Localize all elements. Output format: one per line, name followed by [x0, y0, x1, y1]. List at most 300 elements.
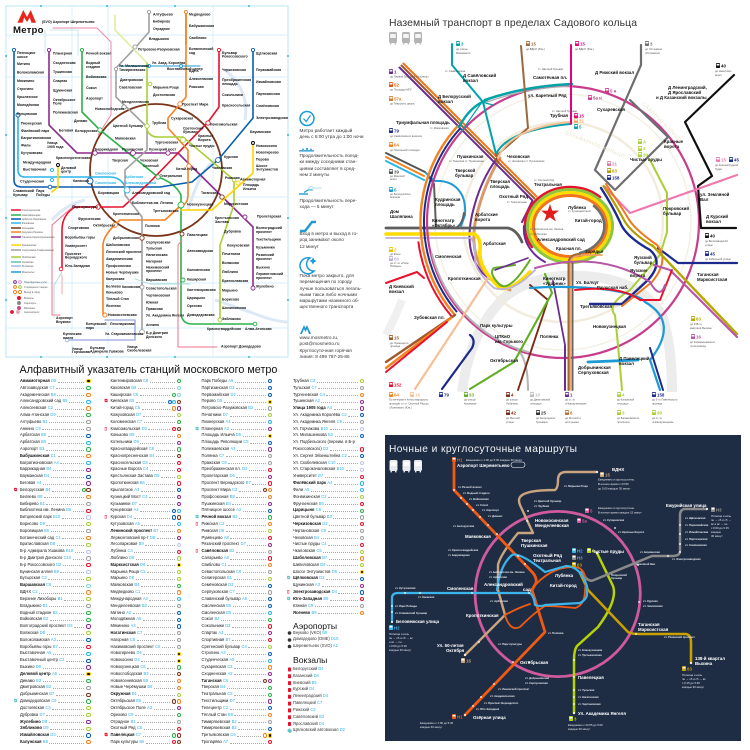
index column 4: Юго-Западная: [293, 596, 322, 601]
metro station labels: Рязанский: [256, 253, 274, 257]
index column 4: C2: [342, 453, 347, 458]
index column 3: Пражская: [202, 460, 220, 465]
metro station labels: Филёвский парк: [21, 129, 50, 133]
metro station labels: Крестьянская: [215, 216, 239, 220]
route legends: ground: до Лужнецкого: [390, 341, 409, 345]
index column 2: B1: [132, 691, 137, 696]
info: transfer: Продолжительность пере-: [300, 198, 357, 202]
index column 1: Битцевский парк: [20, 514, 52, 519]
metro station labels: Кунцевская: [17, 112, 37, 116]
metro station labels: Третьяковская: [153, 209, 179, 213]
index column 2: Новослободская: [110, 671, 142, 676]
night labels: каждые 30 минут: [568, 727, 591, 731]
index column 3: B1: [227, 575, 232, 580]
night labels: ст. Партизанская: [685, 537, 708, 541]
list: railway stations: [293, 666, 345, 732]
index column 1: Выставочный центр: [20, 657, 58, 662]
night labels: Н1: [457, 458, 463, 462]
ground labels: вокзал: [619, 361, 634, 366]
info: night advice: маршрутами наземного об-: [300, 298, 359, 303]
ground labels: бульвар: [663, 211, 682, 216]
index column 2: Охотный Ряд: [110, 725, 136, 730]
metro station labels: Скобелевская: [127, 348, 151, 352]
index column 2: Каховская: [110, 385, 130, 390]
metro station labels: Добрынинская: [113, 236, 139, 240]
index column 4: C9: [321, 528, 326, 533]
ground labels: Третьяковская: [580, 304, 612, 309]
index column 2: D4: [127, 514, 132, 519]
night labels: Кропоткинская: [466, 613, 499, 618]
index column 2: C8: [155, 644, 160, 649]
metro station labels: Нагорная: [146, 260, 162, 264]
metro station labels: Электрозаводская: [256, 116, 288, 120]
night labels: до 5:00 каждые 30 минут: [598, 486, 631, 490]
index column 1: B5: [62, 398, 67, 403]
index column 1: A3: [51, 637, 56, 642]
info: contacts: www.mosmetro.ru,: [300, 335, 338, 340]
metro station labels: проспект: [256, 257, 272, 261]
route legends: ground: до Никитских: [715, 69, 732, 73]
metro station labels: Смоленская: [95, 181, 116, 185]
list: railway stations: Киевский B5: [293, 680, 317, 685]
night labels: с 0:00 до 5:30: [389, 644, 407, 648]
night labels: ст. Баррикадная: [448, 553, 470, 557]
metro station labels: Волжская: [222, 261, 239, 265]
metro station labels: Измайловская: [256, 80, 281, 84]
metro station labels: проспект: [146, 269, 162, 273]
metro station labels: Печатники: [222, 252, 240, 256]
metro station labels: Битцевский: [86, 322, 107, 326]
index column 2: Мякинино: [110, 623, 129, 628]
ground labels: ЦПКиО: [495, 334, 511, 339]
index column 2: B9: [129, 432, 134, 437]
ground labels: им. Горького: [495, 339, 523, 344]
index column 1: D8: [50, 541, 55, 546]
route legends: ground: 40: [721, 64, 726, 68]
map legend: Строящиеся станции: [24, 286, 48, 289]
index column 2: D4: [134, 657, 140, 662]
metro station labels: Пролетарская: [257, 214, 281, 218]
night labels: ст. Цветной бульвар: [534, 499, 562, 503]
index column 4: Шаболовская: [293, 555, 321, 560]
index column 4: Трубная: [293, 378, 309, 383]
index column 2: Люблино: [110, 555, 128, 560]
info: schedule: [300, 128, 364, 139]
index column 1: Александровский сад: [20, 398, 61, 403]
route legends: ground: 15: [531, 42, 536, 46]
night labels: Беловежская улица: [396, 619, 440, 624]
metro station labels: Международная: [23, 160, 51, 164]
index column 1: B2: [43, 616, 48, 621]
index column 3: B2: [229, 548, 234, 553]
index column 2: A2: [126, 610, 131, 615]
index column 2: Лубянка: [110, 548, 126, 553]
metro station labels: Красные: [198, 134, 213, 138]
index column 3: D2: [230, 392, 236, 397]
map legend: Сокольническая: [22, 209, 41, 212]
index column 3: D3: [229, 385, 234, 390]
night labels: 63: [687, 666, 692, 672]
index column 1: Водный стадион: [20, 610, 51, 615]
index column 1: B10: [66, 548, 73, 553]
index column 4: Щукинская: [293, 582, 314, 587]
index column 3: A5: [242, 596, 247, 601]
route legends: ground: до Останкино: [645, 47, 663, 51]
night labels: Ежедневно с 1:00 до 5:30: [420, 721, 454, 725]
index column 4: D5: [332, 569, 337, 574]
index column 3: C6: [223, 678, 228, 683]
index column 3: Саларьево: [202, 555, 223, 560]
ground labels: Театральная: [534, 182, 562, 187]
metro station labels: Каховская: [122, 285, 140, 289]
metro station labels: проспект: [256, 230, 272, 234]
index column 3: Планерная: [202, 426, 223, 431]
info: interval: нем 2 минуты: [300, 172, 329, 177]
index column 4: C4: [321, 541, 327, 546]
index column 2: Красносельская: [110, 460, 141, 465]
route legends: ground: до Загородного: [536, 416, 556, 420]
metro station labels: Университет: [65, 244, 87, 248]
ground labels: [389, 67, 730, 375]
info: schedule: Метро работает каждый: [300, 128, 352, 132]
index column 1: A4: [37, 480, 42, 485]
index column 3: B5: [226, 610, 231, 615]
ground labels: Д Рижский вокзал: [595, 70, 634, 75]
ground labels: ст. Тверская ст. Пушкинская: [449, 159, 484, 163]
route legends: ground: до Кабельной улицы: [705, 257, 731, 261]
ground labels: ст. Цветной бульвар: [538, 67, 564, 71]
index column 2: A5: [135, 521, 140, 526]
index column 2: A4: [134, 507, 139, 512]
route legends: ground: проезда: [652, 402, 663, 406]
index column 4: B3: [327, 514, 332, 519]
index column 2: A3: [134, 487, 139, 492]
index column 2: Парк культуры: [110, 739, 138, 744]
index column 1: C8: [46, 582, 51, 587]
ground labels: Новокузнецкая: [593, 324, 626, 329]
index column 3: Пионерская: [202, 419, 224, 424]
night labels: ст. Измайловская: [685, 530, 709, 534]
night labels: Покровский: [611, 573, 627, 577]
map legend: Замоскворецкая: [22, 214, 41, 217]
info: contacts: post@mosmetro.ru: [300, 341, 339, 346]
metro station labels: [13, 12, 288, 354]
metro station labels: Зябликово: [222, 317, 241, 321]
info: entry: 12 минут: [300, 244, 319, 249]
metro station labels: Поле: [53, 102, 62, 106]
metro station labels: Баррикадная: [95, 148, 118, 152]
index column 1: B6: [44, 528, 49, 533]
night labels: Озёрная улица: [473, 715, 506, 720]
night labels: ст. Арбатская: [489, 575, 507, 579]
index column 3: B2: [214, 616, 219, 621]
index column 1: D8: [40, 630, 45, 635]
index column 1: D2: [56, 562, 61, 567]
index column 4: C7: [311, 385, 317, 390]
metro station labels: Горчакова: [72, 350, 90, 354]
metro station labels: Библиотека им. Ленина: [132, 201, 173, 205]
ground labels: Зарядье: [585, 249, 604, 254]
metro station labels: Пионерская: [21, 122, 42, 126]
night labels: [389, 457, 732, 731]
list: railway stations: Рижский C3: [293, 707, 316, 712]
metro station labels: Лермонтовский: [256, 272, 283, 276]
index column 1: B4: [46, 466, 51, 471]
index column 4: C4: [320, 392, 325, 397]
metro station labels: Улица: [127, 345, 138, 349]
night labels: 15: [605, 472, 610, 478]
route legends: ground: до ст. м. «Парк: [390, 261, 409, 265]
index column 2: Нагорная: [110, 637, 128, 642]
index column 3: Серпуховская: [202, 589, 228, 594]
metro station labels: Киевская: [73, 179, 89, 183]
index column 1: C9: [51, 698, 56, 703]
metro station labels: Братиславская: [222, 279, 248, 283]
night labels: ст. Белорусская: [453, 524, 475, 528]
index column 3: D3: [228, 582, 233, 587]
ground labels: ул. Каретный Ряд: [528, 93, 567, 98]
ground labels: Раушская наб.: [597, 285, 628, 290]
night labels: ст. Водный стадион: [463, 491, 490, 495]
index column 1: C1: [51, 453, 56, 458]
map legend: Арбатско-Покровская: [22, 218, 47, 221]
metro station labels: Улица: [47, 141, 58, 145]
index column 2: Кузнецкий Мост: [110, 494, 141, 499]
map legend: Филёвская: [22, 222, 35, 225]
metro station labels: Выставочный центр: [167, 67, 203, 71]
icons: ground vehicles: [389, 32, 422, 44]
index column 1: Алтуфьево: [20, 419, 41, 424]
index column 1: B8: [51, 392, 56, 397]
index column 4: Ул. Горчакова: [293, 426, 319, 431]
ground labels: Покровский: [663, 206, 689, 211]
ground labels: Яузские: [630, 268, 648, 273]
index column 1: Волгоградский проспект: [20, 623, 66, 628]
metro station labels: Марьино: [222, 288, 238, 292]
index column 1: ВДНХ: [20, 589, 31, 594]
ground labels: Яузский: [634, 255, 652, 260]
route legends: ground: ного рынка: [565, 421, 579, 424]
ground labels: Кудринская: [435, 197, 461, 202]
index column 3: Сокол: [202, 616, 213, 621]
route legends: ground: 3: [643, 146, 646, 151]
night labels: ВДНХ: [612, 467, 624, 472]
metro station labels: Каширская: [187, 278, 206, 282]
metro station labels: Театральная: [160, 174, 182, 178]
index column 3: B2: [232, 514, 238, 519]
index column 3: Проспект Мира: [202, 487, 231, 492]
index column 3: [196, 378, 272, 744]
metro station labels: Щукинская: [53, 88, 72, 92]
night labels: ст. Бауманская: [640, 550, 660, 554]
ground labels: площадь: [490, 184, 510, 189]
info: night advice: ными такси либо ночными: [300, 292, 357, 297]
ground labels: Д Савёловский: [463, 73, 496, 78]
night labels: ст. Нагатинская: [578, 695, 599, 699]
metro station labels: Новые Черёмушки: [106, 270, 139, 274]
index column 3: Смоленская: [202, 603, 225, 608]
night labels: ст. Сухаревская: [603, 518, 625, 522]
metro station labels: Чеховская: [140, 158, 158, 162]
ground labels: Таганская: [697, 272, 719, 277]
route legends: ground: 33: [469, 392, 474, 398]
metro station labels: Марьина Роща: [153, 86, 179, 90]
info: interval: [300, 153, 359, 177]
index column 3: B8: [230, 494, 235, 499]
index column 1: C9: [35, 426, 41, 431]
info: entry: род занимают около: [300, 237, 344, 242]
ground labels: Добрынинская: [578, 365, 611, 370]
metro station labels: Комсомольская: [210, 122, 237, 126]
index column 2: Лермонтовский пр-т: [110, 535, 149, 540]
ground labels: ст. Театральная: [507, 200, 527, 204]
route legends: ground: до улицы: [506, 398, 518, 402]
route legends: ground: 15: [579, 114, 584, 118]
index column 1: Авиамоторная: [20, 378, 50, 383]
night labels: Новокосинская: [535, 518, 569, 523]
ground labels: Д Курский: [706, 214, 728, 219]
metro station labels: Белорусская: [75, 129, 97, 133]
night labels: с 0:15 до 5:45: [682, 681, 700, 685]
index column 3: D5: [236, 432, 241, 437]
metro station labels: Ленинский проспект: [106, 250, 142, 254]
route legends: ground: до ВДНХ (Юж.): [526, 47, 545, 51]
ground labels: ст. Чеховская ст. Пушкинская: [508, 159, 545, 163]
metro station labels: (SVO) Аэропорт Шереметьево: [42, 20, 95, 24]
index column 3: C3: [227, 664, 232, 669]
map legend: Кольцевая: [22, 227, 35, 230]
index column 2: C9: [149, 446, 154, 451]
index column 2: Красногвардейская: [110, 446, 147, 451]
route legends: ground: А: [643, 140, 647, 144]
metro station labels: Партизанская: [256, 92, 280, 96]
ground labels: Дом: [390, 209, 399, 214]
metro station labels: Ул. Старокачаловская: [105, 332, 143, 336]
index column 3: B5: [226, 603, 231, 608]
metro station labels: Шаболовская: [106, 243, 130, 247]
text: ▯: [196, 521, 198, 526]
metro station labels: Новогиреево: [256, 150, 279, 154]
route legends: ground: до Белорусского: [390, 192, 411, 196]
index column 3: D7: [223, 412, 228, 417]
night labels: ст. Новокузнецкая: [578, 648, 603, 652]
index column 2: Нагатинская: [110, 630, 136, 635]
route legends: ground: 63: [612, 168, 617, 174]
night labels: Земляной Вал: [636, 562, 656, 566]
index column 3: A2: [228, 671, 233, 676]
map legend: Бутовская: [22, 265, 34, 268]
night labels: Александровский: [484, 582, 523, 587]
route legends: ground: 3: [461, 42, 464, 46]
route legends: ground: до Савёловского вокзала: [390, 134, 422, 138]
ground labels: Арбатская: [483, 241, 506, 246]
metro station labels: Митино: [17, 62, 30, 66]
metro station labels: Улица: [72, 347, 83, 351]
index column 4: Тургеневская: [293, 392, 318, 397]
index column 2: Коньково: [110, 432, 128, 437]
text: ⧉: [104, 732, 108, 737]
index column 3: Рязанский проспект: [202, 541, 239, 546]
index column 2: C8: [130, 637, 135, 642]
ground labels: бульвар: [634, 260, 653, 265]
route legends: ground: Крымская: [464, 402, 477, 406]
index column 2: B4: [134, 582, 139, 587]
night labels: 3: [574, 716, 577, 722]
index column 2: D8: [150, 535, 155, 540]
night labels: ст. Киевская: [418, 595, 435, 599]
night labels: ст. Кутузовская: [395, 586, 416, 590]
metro station labels: шоссе: [17, 55, 28, 59]
icon: clock check: [300, 112, 314, 126]
metro station labels: Римская: [225, 176, 240, 180]
metro station labels: Бунинская: [63, 332, 81, 336]
night labels: Пушкинская: [521, 543, 548, 548]
index column 1: Ботанический сад: [20, 535, 54, 540]
index column 2: Ленинский проспект: [110, 528, 152, 533]
metro station labels: Свиблово: [189, 36, 206, 40]
ground labels: Кропоткинская: [448, 276, 481, 281]
index column 2: B7: [153, 528, 158, 533]
metro station labels: Аэропорт Домодедово: [221, 344, 261, 348]
index heading: Алфавитный указатель станций московского метро: [20, 364, 277, 376]
route legends: ground: 6: [394, 188, 397, 192]
index column 1: D3: [50, 732, 56, 737]
ground labels: Чистые пруды: [630, 157, 662, 162]
index column 1: B7: [53, 644, 58, 649]
night routes: [392, 463, 707, 715]
metro station labels: Победы: [36, 193, 50, 197]
metro station labels: Мякинино: [17, 79, 34, 83]
index column 2: C9: [128, 712, 133, 717]
info: night advice: перемещения по городу: [300, 279, 352, 284]
index column 1: Беговая: [20, 480, 35, 485]
info: transfer: [300, 198, 357, 209]
index column 4: Чертановская: [293, 528, 319, 533]
ground labels: вокзал: [389, 289, 404, 294]
index column 1: Братиславская: [20, 541, 49, 546]
index column 3: Площадь Ильича: [202, 432, 235, 437]
index column 4: Южная: [293, 603, 307, 608]
info: night advice: щественного транспорта: [300, 304, 353, 309]
ground labels: ст. Библиотека им. Ленина: [530, 227, 564, 231]
route legends: ground: «Новокузнецкая»: [565, 402, 587, 406]
metro station labels: Первомайская: [256, 68, 281, 72]
index column 2: B5: [129, 398, 134, 403]
metro station labels: Лесопарковая: [110, 322, 135, 326]
ground labels: вокзал: [706, 219, 721, 224]
index column 3: Полежаевская: [202, 446, 229, 451]
metro station labels: Курская: [224, 155, 238, 159]
icon: escalator: [300, 222, 316, 231]
index column 2: D6: [140, 562, 145, 567]
night labels: ст. Войковская: [469, 497, 489, 501]
route legends: ground: 158: [612, 176, 620, 180]
index column 1: Автозаводская: [20, 385, 48, 390]
metro station labels: Спортивная: [68, 226, 89, 230]
metro station labels: Академическая: [106, 257, 133, 261]
metro station labels: Ворота: [198, 138, 211, 142]
metro station labels: Вернадского: [65, 256, 87, 260]
index column 3: Славянский бульвар: [202, 596, 241, 601]
index column 4: C9: [308, 603, 313, 608]
info: night advice: Пока метро закрыто, для: [300, 273, 354, 278]
index column 2: Октябрьская: [110, 698, 135, 703]
index column 1: C3: [45, 705, 51, 710]
index column 3: B7: [226, 637, 231, 642]
index column 3: Третьяковская: [202, 732, 229, 737]
index column 1: Баррикадная: [20, 466, 45, 471]
metro station labels: Бульвар: [222, 51, 237, 55]
